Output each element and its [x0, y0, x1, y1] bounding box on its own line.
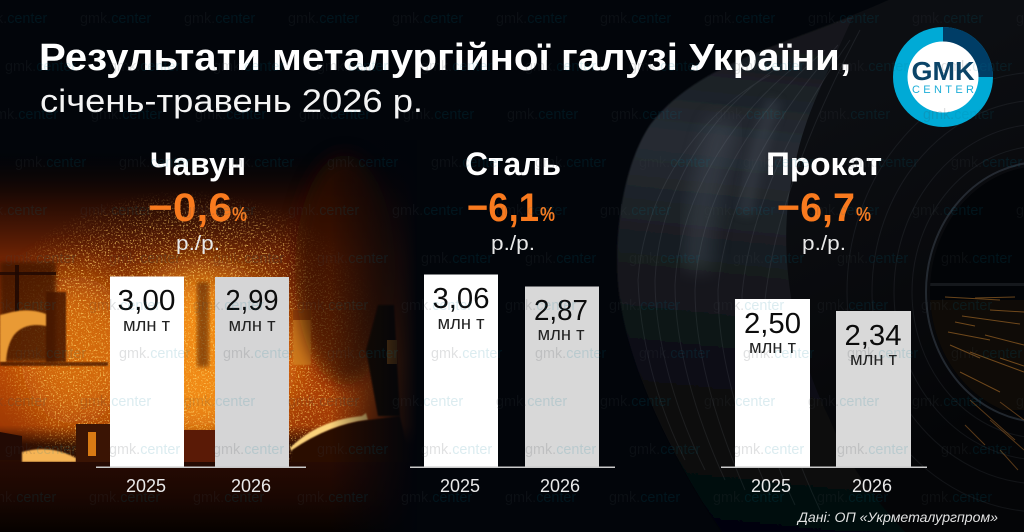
- watermark: center: [111, 394, 151, 410]
- watermark: center: [7, 11, 47, 27]
- watermark: center: [538, 107, 578, 123]
- watermark: center: [7, 394, 47, 410]
- watermark: gmk.: [184, 203, 215, 219]
- axis: чавун: [96, 466, 306, 468]
- watermark: center: [954, 107, 994, 123]
- bar: прокат 2025: [735, 299, 810, 468]
- watermark: gmk.: [421, 251, 452, 267]
- watermark: gmk.: [317, 59, 348, 75]
- watermark: gmk.: [223, 346, 254, 362]
- watermark: gmk.: [525, 442, 556, 458]
- bar: прокат 2026: [836, 311, 911, 468]
- watermark: gmk.: [535, 346, 566, 362]
- change: чавун: −0,6: [148, 186, 232, 230]
- watermark: center: [566, 155, 606, 171]
- change: сталь: %: [540, 204, 555, 226]
- value: сталь 2025: [432, 283, 490, 333]
- source note: Дані: ОП «Укрметалургпром»: [796, 509, 998, 525]
- watermark: gmk.: [496, 203, 527, 219]
- watermark: gmk.: [5, 251, 36, 267]
- watermark: center: [244, 251, 284, 267]
- watermark: gmk.: [80, 11, 111, 27]
- watermark: gmk.: [317, 251, 348, 267]
- watermark: center: [46, 155, 86, 171]
- watermark: center: [150, 346, 190, 362]
- watermark: center: [952, 490, 992, 506]
- watermark: center: [423, 11, 463, 27]
- watermark: center: [764, 59, 804, 75]
- watermark: center: [16, 298, 56, 314]
- watermark: center: [330, 107, 370, 123]
- watermark: center: [434, 107, 474, 123]
- value: сталь 2026: 2,87: [534, 295, 588, 327]
- watermark: center: [556, 251, 596, 267]
- watermark: gmk.: [288, 203, 319, 219]
- watermark: center: [943, 11, 983, 27]
- watermark: gmk.: [817, 298, 848, 314]
- note: прокат year on year: р./р.: [802, 233, 846, 255]
- logo: GMK Center: CENTER: [912, 84, 974, 96]
- watermark: center: [319, 203, 359, 219]
- watermark: gmk.: [195, 107, 226, 123]
- watermark: gmk.: [496, 11, 527, 27]
- watermark: center: [839, 203, 879, 219]
- value: прокат 2026: млн т: [850, 349, 897, 369]
- watermark: gmk.: [923, 107, 954, 123]
- watermark: center: [735, 11, 775, 27]
- watermark: gmk.: [713, 490, 744, 506]
- watermark: center: [848, 490, 888, 506]
- value: сталь 2026: [534, 295, 588, 344]
- watermark: center: [868, 442, 908, 458]
- watermark: gmk.: [600, 11, 631, 27]
- watermark: center: [972, 59, 1012, 75]
- watermark: center: [16, 490, 56, 506]
- change: прокат: −6,7: [777, 186, 855, 230]
- value: сталь 2026: млн т: [538, 324, 584, 344]
- watermark: gmk.: [609, 298, 640, 314]
- watermark: center: [7, 203, 47, 219]
- watermark: gmk.: [639, 346, 670, 362]
- watermark: gmk.: [89, 490, 120, 506]
- watermark: gmk.: [921, 490, 952, 506]
- watermark: gmk.: [535, 155, 566, 171]
- watermark: gmk.: [733, 442, 764, 458]
- change: прокат: %: [856, 204, 871, 226]
- watermark: center: [744, 298, 784, 314]
- watermark: center: [348, 442, 388, 458]
- watermark: gmk.: [91, 107, 122, 123]
- watermark: center: [670, 346, 710, 362]
- watermark: gmk.: [837, 442, 868, 458]
- watermark: gmk.: [951, 155, 982, 171]
- watermark: center: [423, 203, 463, 219]
- panel: чавун: [96, 146, 306, 496]
- watermark: center: [328, 490, 368, 506]
- watermark: center: [868, 251, 908, 267]
- watermark: center: [839, 394, 879, 410]
- watermark: center: [640, 298, 680, 314]
- watermark: center: [735, 394, 775, 410]
- watermark: gmk.: [733, 251, 764, 267]
- change: сталь: −6,1: [467, 186, 539, 230]
- watermark: gmk.: [704, 203, 735, 219]
- watermark: center: [319, 394, 359, 410]
- watermark: gmk.: [629, 251, 660, 267]
- watermark: gmk.: [733, 59, 764, 75]
- value: прокат 2026: [844, 320, 902, 369]
- watermark: gmk.: [912, 394, 943, 410]
- watermark: gmk.: [403, 107, 434, 123]
- value: чавун 2025: млн т: [123, 315, 170, 335]
- watermark: center: [746, 107, 786, 123]
- watermark: center: [36, 59, 76, 75]
- watermark: center: [764, 251, 804, 267]
- watermark: center: [254, 346, 294, 362]
- watermark: gmk.: [213, 251, 244, 267]
- watermark: gmk.: [401, 490, 432, 506]
- watermark: center: [972, 442, 1012, 458]
- watermark: center: [18, 107, 58, 123]
- year: сталь 2026: 2026: [540, 476, 580, 496]
- value: сталь 2025: млн т: [438, 313, 484, 333]
- value: прокат 2025: млн т: [749, 337, 796, 357]
- watermark: center: [244, 442, 284, 458]
- note: чавун year on year: р./р.: [176, 233, 220, 255]
- title: main line: Результати металургійної галузі України,: [39, 37, 851, 79]
- watermark: gmk.: [496, 394, 527, 410]
- watermark: gmk.: [193, 298, 224, 314]
- watermark: center: [348, 59, 388, 75]
- watermark: gmk.: [213, 442, 244, 458]
- watermark: gmk.: [288, 394, 319, 410]
- background: coil eye: [926, 162, 1024, 422]
- watermark: gmk.: [392, 11, 423, 27]
- watermark: center: [358, 346, 398, 362]
- title: [39, 37, 851, 119]
- watermark: center: [660, 442, 700, 458]
- watermark: gmk.: [288, 11, 319, 27]
- year: сталь 2025: 2025: [440, 476, 480, 496]
- watermark: gmk.: [184, 394, 215, 410]
- watermark: gmk.: [600, 203, 631, 219]
- watermark: gmk.: [704, 394, 735, 410]
- watermark: gmk.: [421, 442, 452, 458]
- axis: сталь: [410, 466, 615, 468]
- watermark: center: [328, 298, 368, 314]
- heading: сталь: Сталь: [465, 146, 561, 182]
- logo: GMK Center: GMK: [912, 56, 975, 86]
- watermark: center: [432, 490, 472, 506]
- watermark: gmk.: [837, 251, 868, 267]
- watermark: gmk.: [847, 346, 878, 362]
- watermark: center: [670, 155, 710, 171]
- watermark: center: [36, 442, 76, 458]
- watermark: gmk.: [713, 298, 744, 314]
- value: чавун 2026: [226, 285, 278, 335]
- watermark: gmk.: [15, 346, 46, 362]
- watermark: gmk.: [5, 442, 36, 458]
- watermark: center: [556, 442, 596, 458]
- watermark: gmk.: [327, 155, 358, 171]
- watermark: gmk.: [297, 298, 328, 314]
- background: furnace glow: [0, 175, 413, 462]
- watermark: gmk.: [213, 59, 244, 75]
- watermark: gmk.: [505, 298, 536, 314]
- watermark: center: [452, 59, 492, 75]
- watermark: center: [556, 59, 596, 75]
- watermark: center: [972, 251, 1012, 267]
- watermark: center: [735, 203, 775, 219]
- watermark: center: [878, 346, 918, 362]
- watermark: gmk.: [327, 346, 358, 362]
- watermark: center: [660, 251, 700, 267]
- watermark: gmk.: [817, 490, 848, 506]
- watermark: gmk.: [629, 442, 660, 458]
- watermark: center: [848, 298, 888, 314]
- watermark: gmk.: [609, 490, 640, 506]
- watermark: center: [224, 298, 264, 314]
- watermark: gmk.: [317, 442, 348, 458]
- watermark: gmk.: [299, 107, 330, 123]
- watermark: center: [839, 11, 879, 27]
- note: сталь year on year: р./р.: [491, 233, 535, 255]
- watermark: gmk.: [507, 107, 538, 123]
- watermark: center: [774, 346, 814, 362]
- watermark: center: [660, 59, 700, 75]
- watermark: gmk.: [109, 59, 140, 75]
- value: чавун 2025: 3,00: [118, 285, 176, 317]
- watermark: center: [943, 394, 983, 410]
- watermark: center: [111, 11, 151, 27]
- watermark: gmk.: [600, 394, 631, 410]
- watermark: center: [120, 298, 160, 314]
- watermark: gmk.: [743, 155, 774, 171]
- watermark: gmk.: [80, 203, 111, 219]
- watermark: gmk.: [223, 155, 254, 171]
- watermark: gmk.: [5, 59, 36, 75]
- watermark: gmk.: [941, 251, 972, 267]
- watermark: center: [215, 11, 255, 27]
- watermark: gmk.: [401, 298, 432, 314]
- watermark: gmk.: [505, 490, 536, 506]
- watermark: gmk.: [392, 203, 423, 219]
- watermark: gmk.: [431, 155, 462, 171]
- watermark: center: [744, 490, 784, 506]
- watermark: gmk.: [921, 298, 952, 314]
- watermark: gmk.: [941, 59, 972, 75]
- watermark: center: [850, 107, 890, 123]
- watermark: center: [224, 490, 264, 506]
- bar: сталь 2025: [424, 274, 498, 468]
- watermark: center: [358, 155, 398, 171]
- watermark: center: [215, 203, 255, 219]
- watermark: gmk.: [184, 11, 215, 27]
- value: сталь 2025: 3,06: [432, 283, 490, 315]
- watermark: gmk.: [743, 346, 774, 362]
- logo: GMK Center: [893, 27, 993, 127]
- watermark: gmk.: [808, 203, 839, 219]
- value: чавун 2026: 2,99: [226, 285, 278, 317]
- watermark: gmk.: [119, 155, 150, 171]
- watermark: center: [764, 442, 804, 458]
- watermark: center: [631, 203, 671, 219]
- watermark: center: [452, 442, 492, 458]
- watermark: gmk.: [629, 59, 660, 75]
- watermark: gmk.: [808, 394, 839, 410]
- watermark: center: [46, 346, 86, 362]
- watermark: gmk.: [109, 251, 140, 267]
- value: прокат 2025: [744, 308, 801, 357]
- watermark: center: [878, 155, 918, 171]
- year: чавун 2026: 2026: [231, 476, 271, 496]
- value: чавун 2026: млн т: [228, 315, 276, 335]
- watermark: gmk.: [912, 11, 943, 27]
- watermark: gmk.: [119, 346, 150, 362]
- watermark: gmk.: [297, 490, 328, 506]
- watermark: gmk.: [193, 490, 224, 506]
- watermark: center: [452, 251, 492, 267]
- value: прокат 2026: 2,34: [844, 320, 902, 352]
- watermark: gmk.: [421, 59, 452, 75]
- bar: чавун 2026: [215, 277, 289, 467]
- watermark: center: [774, 155, 814, 171]
- watermark: gmk.: [837, 59, 868, 75]
- year: прокат 2025: 2025: [751, 476, 791, 496]
- watermark: center: [527, 203, 567, 219]
- watermark: gmk.: [80, 394, 111, 410]
- bar: сталь 2026: [525, 286, 599, 468]
- year: чавун 2025: 2025: [126, 476, 166, 496]
- watermark: gmk.: [15, 155, 46, 171]
- watermark: center: [631, 394, 671, 410]
- watermark: center: [122, 107, 162, 123]
- watermark: center: [982, 155, 1022, 171]
- watermark: center: [432, 298, 472, 314]
- watermark: center: [111, 203, 151, 219]
- change: чавун: %: [232, 204, 247, 226]
- watermark: center: [536, 490, 576, 506]
- watermark: center: [150, 155, 190, 171]
- watermark: center: [952, 298, 992, 314]
- background: furnace structures: [0, 130, 617, 532]
- watermark: center: [642, 107, 682, 123]
- watermark: center: [640, 490, 680, 506]
- watermark: center: [536, 298, 576, 314]
- background: lower sparks: [965, 400, 1024, 470]
- watermark: center: [631, 11, 671, 27]
- watermark: center: [943, 203, 983, 219]
- watermark: center: [462, 155, 502, 171]
- year: прокат 2026: 2026: [852, 476, 892, 496]
- watermark: center: [140, 59, 180, 75]
- watermark: center: [566, 346, 606, 362]
- value: прокат 2025: 2,50: [744, 308, 801, 340]
- heading: прокат: Прокат: [766, 146, 882, 182]
- watermark: gmk.: [847, 155, 878, 171]
- watermark: center: [226, 107, 266, 123]
- watermark: center: [140, 251, 180, 267]
- watermark: gmk.: [808, 11, 839, 27]
- watermark: gmk.: [611, 107, 642, 123]
- panel: сталь: [410, 146, 615, 496]
- watermark: gmk.: [525, 59, 556, 75]
- value: чавун 2025: [118, 285, 176, 335]
- panel: прокат: [721, 146, 927, 496]
- watermark: center: [254, 155, 294, 171]
- watermark: center: [140, 442, 180, 458]
- watermark: center: [423, 394, 463, 410]
- watermark: gmk.: [431, 346, 462, 362]
- watermark: center: [215, 394, 255, 410]
- watermark: gmk.: [912, 203, 943, 219]
- watermark: gmk.: [941, 442, 972, 458]
- watermark: center: [244, 59, 284, 75]
- watermark: center: [527, 394, 567, 410]
- watermark: gmk.: [89, 298, 120, 314]
- watermark: gmk.: [951, 346, 982, 362]
- watermark: center: [868, 59, 908, 75]
- background: steel coil: [617, 0, 1024, 532]
- watermark: center: [120, 490, 160, 506]
- watermark: gmk.: [639, 155, 670, 171]
- watermark: center: [348, 251, 388, 267]
- watermark: center: [36, 251, 76, 267]
- watermark: gmk.: [392, 394, 423, 410]
- watermark: center: [319, 11, 359, 27]
- axis: прокат: [721, 466, 927, 468]
- watermark: gmk.: [704, 11, 735, 27]
- watermark: center: [527, 11, 567, 27]
- bar: чавун 2025: [110, 276, 184, 468]
- heading: чавун: Чавун: [150, 146, 246, 182]
- watermark: gmk.: [715, 107, 746, 123]
- watermark: gmk.: [819, 107, 850, 123]
- watermark: center: [982, 346, 1022, 362]
- watermark: gmk.: [109, 442, 140, 458]
- watermark: gmk.: [525, 251, 556, 267]
- watermark: center: [462, 346, 502, 362]
- title: period line: січень-травень 2026 р.: [40, 83, 423, 119]
